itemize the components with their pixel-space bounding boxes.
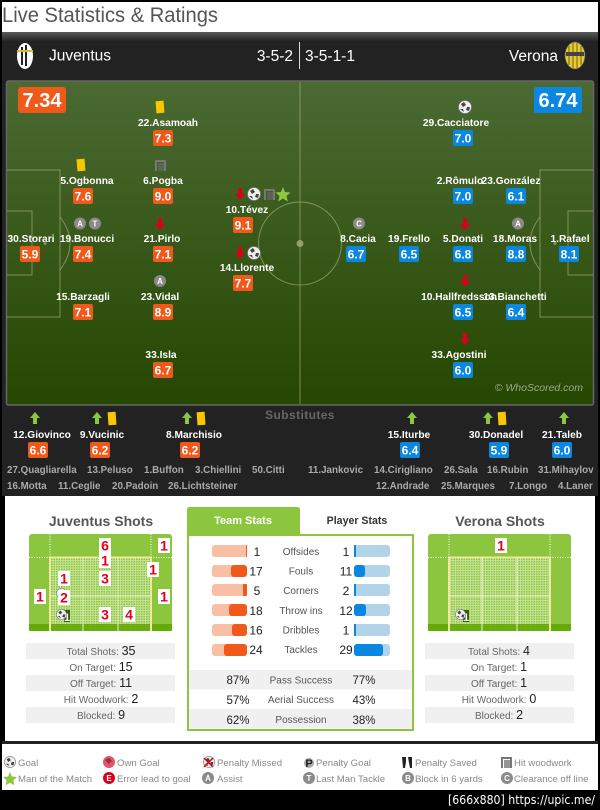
away team name: Verona: [509, 48, 558, 65]
stats panel: [5, 496, 595, 741]
comparison values: Dribbles: [283, 626, 319, 636]
percentage rows: Pass Success: [270, 676, 332, 686]
tab: Team Stats: [187, 507, 300, 535]
player: Storari: 30.Storari: [8, 234, 55, 245]
legend: Own Goal: Own Goal: [117, 758, 160, 769]
percentage rows: Possession: [275, 715, 327, 726]
player: Donati: [443, 218, 483, 262]
player: Pirlo: 21.Pirlo: [144, 234, 180, 245]
comparison values: 18: [249, 604, 263, 618]
shot map: 6: [101, 538, 109, 554]
player: Vidal: 23.Vidal: [141, 292, 179, 303]
away formation: 3-5-1-1: [305, 48, 355, 65]
percentage rows: 38%: [352, 715, 376, 727]
comparison bars: [212, 545, 390, 656]
shot totals: Hit Woodwork: 2: [64, 692, 138, 706]
player: Vidal: [141, 275, 179, 320]
shot map: 1: [160, 588, 168, 604]
percentage rows: [189, 670, 412, 728]
comparison values: [249, 545, 353, 657]
legend: Penalty Goal: P: [305, 758, 313, 770]
legend: Man of the Match: [3, 772, 92, 785]
legend: Assist: A: [205, 774, 211, 783]
shot totals: On Target: 1: [471, 660, 527, 674]
player: González: 6.1: [508, 190, 525, 204]
shot totals: Blocked: 9: [77, 708, 125, 722]
shot map: [428, 534, 571, 631]
percentage rows: 62%: [226, 715, 250, 727]
tab: Player Stats: Player Stats: [327, 515, 387, 527]
icon: Verona badge: [565, 42, 585, 69]
shot totals: [26, 643, 175, 723]
player: Hallfredsson: 6.5: [455, 306, 472, 320]
legend: Penalty Missed: Penalty Missed: [217, 758, 282, 769]
unused subs: 25.Marques: [441, 481, 495, 492]
player: Cacia: [340, 218, 376, 262]
comparison values: 2: [343, 584, 350, 598]
sub: Taleb: 21.Taleb: [542, 430, 582, 441]
player: Hallfredsson: [421, 275, 497, 320]
sub: Donadel: 5.9: [491, 444, 508, 458]
home team name: Juventus: [49, 48, 111, 64]
player: Ogbonna: 5.Ogbonna: [60, 176, 114, 187]
player: Bianchetti: 6.4: [508, 306, 525, 320]
sub: Vucinic: 6.2: [92, 444, 109, 458]
shot totals: Hit Woodwork: 0: [462, 692, 536, 706]
away team rating: 6.74: [539, 90, 578, 112]
shot map: 1: [101, 552, 109, 568]
percentage rows: 87%: [226, 675, 250, 687]
player: Cacciatore: 7.0: [455, 132, 472, 146]
player: Tévez: 9.1: [235, 218, 252, 232]
comparison values: 11: [340, 564, 353, 578]
player: Cacciatore: 29.Cacciatore: [423, 118, 489, 129]
sub: Vucinic: [80, 412, 125, 458]
player: Agostini: [432, 333, 487, 378]
player: Ogbonna: 7.6: [75, 190, 92, 204]
title bar: [2, 2, 598, 32]
heading: Juventus Shots: [49, 513, 153, 529]
shot totals: Total Shots: 35: [67, 644, 136, 658]
shot map: 2: [60, 590, 68, 606]
shot map: 4: [125, 606, 133, 622]
legend: Goal: Goal: [18, 758, 38, 769]
comparison values: 1: [343, 545, 350, 559]
comparison values: 17: [249, 564, 263, 578]
player: Isla: 6.7: [155, 364, 172, 378]
shot map: 1: [64, 612, 70, 624]
unused subs: 14.Cirigliano: [374, 465, 433, 476]
player: Llorente: 14.Llorente: [220, 263, 275, 274]
player: Cacia: C: [356, 220, 362, 228]
legend: [2, 741, 598, 790]
player: Bonucci: T: [93, 220, 98, 228]
player: Agostini: 33.Agostini: [432, 350, 487, 361]
tab: Team Stats: Team Stats: [214, 515, 272, 527]
legend: Penalty Saved: Penalty Saved: [415, 758, 477, 769]
comparison values: Fouls: [289, 566, 313, 578]
icon: Juventus badge: [17, 43, 33, 69]
legend: Assist: Assist: [217, 774, 243, 785]
shot map: 1: [497, 538, 505, 554]
shot map: 3: [101, 606, 109, 622]
player: Rômulo: 7.0: [455, 190, 472, 204]
shot map: 1: [160, 538, 168, 554]
player: Pirlo: 7.1: [155, 248, 172, 262]
unused subs: 1.Buffon: [144, 465, 184, 476]
player: Llorente: [220, 246, 275, 291]
percentage rows: Aerial Success: [268, 695, 334, 706]
unused subs: 26.Lichtsteiner: [168, 481, 237, 492]
panel: Juventus shots: [26, 513, 175, 723]
home formation: 3-5-2: [257, 48, 293, 65]
player: Vidal: 8.9: [155, 306, 172, 320]
sub: Donadel: [469, 412, 523, 458]
comparison values: Offsides: [283, 547, 319, 558]
player: Barzagli: [56, 292, 110, 320]
player: Isla: 33.Isla: [145, 350, 177, 361]
home players: [8, 101, 290, 378]
legend: Clearance off line: C: [504, 774, 510, 783]
player: Isla: [145, 350, 177, 378]
player: Frello: 6.5: [401, 248, 418, 262]
legend: Own Goal: [103, 756, 160, 769]
sub: Taleb: 6.0: [554, 444, 571, 458]
player: González: 23.González: [482, 176, 540, 187]
player: Bianchetti: 13.Bianchetti: [483, 292, 547, 303]
player: Rômulo: 2.Rômulo: [437, 176, 483, 187]
player: Cacia: 6.7: [348, 248, 365, 262]
sub: Iturbe: 15.Iturbe: [388, 430, 431, 441]
player: Pogba: 9.0: [155, 190, 172, 204]
sub: Iturbe: [388, 412, 431, 458]
player: Rafael: [550, 234, 590, 262]
sub: Iturbe: 6.4: [402, 444, 419, 458]
comparison values: 29: [339, 643, 353, 657]
player: González: [482, 176, 540, 204]
player: Tévez: [226, 187, 290, 233]
unused subs: 7.Longo: [509, 481, 547, 492]
legend: Block in 6 yards: B: [405, 774, 411, 783]
player: Bonucci: 19.Bonucci: [60, 234, 114, 245]
player: Bianchetti: [483, 292, 547, 320]
shot map: 1: [463, 612, 469, 624]
legend: Last Man Tackle: Last Man Tackle: [316, 774, 385, 785]
sub: Donadel: 30.Donadel: [469, 430, 523, 441]
player: Vidal: A: [157, 277, 163, 286]
player: Rômulo: [437, 176, 483, 204]
player: Moras: [493, 218, 537, 262]
unused subs: 16.Motta: [7, 481, 47, 492]
player: Bonucci: [60, 218, 114, 262]
unused subs: 12.Andrade: [376, 481, 430, 492]
title bar: Live Statistics & Ratings: [2, 3, 218, 27]
player: Rafael: 8.1: [561, 248, 578, 262]
player: Ogbonna: [60, 159, 114, 204]
legend: Last Man Tackle: T: [307, 774, 312, 783]
player: Bonucci: 7.4: [75, 248, 92, 262]
panel: team stats: [187, 507, 413, 730]
unused subs: 31.Mihaylov: [538, 465, 594, 476]
comparison values: 24: [249, 643, 263, 657]
legend: Penalty Goal: Penalty Goal: [316, 758, 371, 769]
unused subs: 11.Jankovic: [308, 465, 364, 476]
percentage rows: 43%: [352, 695, 376, 707]
player: Barzagli: 15.Barzagli: [56, 292, 110, 303]
away team rating: [534, 87, 582, 113]
sub: Giovinco: [13, 412, 71, 458]
shot totals: On Target: 15: [69, 660, 133, 674]
player: Storari: [8, 234, 55, 262]
shot map: [29, 534, 172, 631]
unused subs: 26.Sala: [444, 465, 478, 476]
legend: Hit woodwork: Hit woodwork: [514, 758, 572, 769]
home team rating: 7.34: [23, 90, 62, 112]
unused subs: 27.Quagliarella: [7, 465, 77, 476]
unused subs: 50.Citti: [252, 465, 285, 476]
shot map: 1: [36, 588, 44, 604]
unused subs: 16.Rubin: [487, 465, 528, 476]
player: Cacciatore: [423, 100, 489, 146]
legend: Goal: [4, 756, 38, 769]
legend: Error lead to goal: Error lead to goal: [117, 774, 191, 785]
comparison values: 16: [249, 624, 263, 638]
shot totals: Off Target: 11: [70, 676, 132, 690]
unused subs: 13.Peluso: [87, 465, 133, 476]
shot map: 1: [149, 562, 157, 578]
player: Frello: 19.Frello: [388, 234, 430, 245]
legend: Error lead to goal: E: [106, 774, 112, 783]
player: Pogba: 6.Pogba: [143, 176, 183, 187]
player: Bonucci: A: [77, 220, 83, 228]
watermark: © WhoScored.com: [495, 382, 583, 394]
comparison values: 1: [254, 545, 261, 559]
shot map: 1: [60, 570, 68, 586]
player: Pirlo: [144, 218, 180, 262]
player: Donati: 6.8: [455, 248, 472, 262]
legend: Clearance off line: Clearance off line: [514, 774, 588, 785]
shot totals: Off Target: 1: [471, 676, 527, 690]
comparison values: 12: [339, 604, 353, 618]
home team rating: [18, 87, 66, 113]
sub: Marchisio: 6.2: [182, 444, 199, 458]
legend: Block in 6 yards: Block in 6 yards: [415, 774, 483, 785]
player: Frello: [388, 234, 430, 262]
sub: Vucinic: 9.Vucinic: [80, 430, 125, 441]
sub: Marchisio: [166, 412, 222, 458]
shot totals: Blocked: 2: [475, 708, 523, 722]
player: Moras: 18.Moras: [493, 234, 537, 245]
player: Donati: 5.Donati: [443, 234, 483, 245]
player: Rafael: 1.Rafael: [550, 234, 590, 245]
comparison values: Tackles: [284, 645, 318, 656]
sub: Taleb: [542, 412, 582, 458]
shot map: 3: [101, 570, 109, 586]
player: Cacia: 8.Cacia: [340, 234, 376, 245]
player: Pogba: [143, 160, 183, 204]
substitutes section: [7, 408, 594, 492]
legend: Assist: [202, 772, 243, 785]
player: Moras: A: [515, 220, 521, 228]
pitch: [6, 81, 594, 405]
player: Llorente: 7.7: [235, 276, 252, 290]
sub: Giovinco: 12.Giovinco: [13, 430, 71, 441]
player: Hallfredsson: 10.Hallfredsson: [421, 292, 497, 303]
unused subs: [7, 465, 594, 492]
unused subs: 20.Padoin: [112, 481, 158, 492]
comparison values: Corners: [283, 586, 319, 597]
shot totals: [425, 643, 574, 723]
away players: [340, 100, 590, 378]
unused subs: 3.Chiellini: [195, 465, 242, 476]
player: Tévez: 10.Tévez: [226, 205, 268, 216]
percentage rows: 77%: [352, 675, 376, 687]
sub: Marchisio: 8.Marchisio: [166, 430, 222, 441]
player: Moras: 8.8: [508, 248, 525, 262]
heading: Verona Shots: [455, 513, 545, 529]
unused subs: 4.Laner: [558, 481, 593, 492]
player: Asamoah: [138, 101, 198, 146]
stats box: [188, 535, 413, 730]
sub: Giovinco: 6.6: [30, 444, 47, 458]
shot totals: Total Shots: 4: [468, 644, 530, 658]
percentage rows: 57%: [226, 695, 250, 707]
player: Asamoah: 22.Asamoah: [138, 118, 198, 129]
comparison values: Throw ins: [279, 606, 323, 617]
substitutes heading: Substitutes: [265, 408, 335, 422]
unused subs: 11.Ceglie: [58, 481, 101, 492]
player: Asamoah: 7.3: [155, 132, 172, 146]
comparison values: 1: [343, 624, 350, 638]
legend: Man of the Match: Man of the Match: [18, 774, 92, 785]
player: Barzagli: 7.1: [75, 306, 92, 320]
comparison values: 5: [254, 584, 261, 598]
match header: [2, 32, 598, 496]
player: Agostini: 6.0: [455, 364, 472, 378]
player: Storari: 5.9: [22, 248, 39, 262]
panel: Verona shots: [425, 513, 574, 723]
